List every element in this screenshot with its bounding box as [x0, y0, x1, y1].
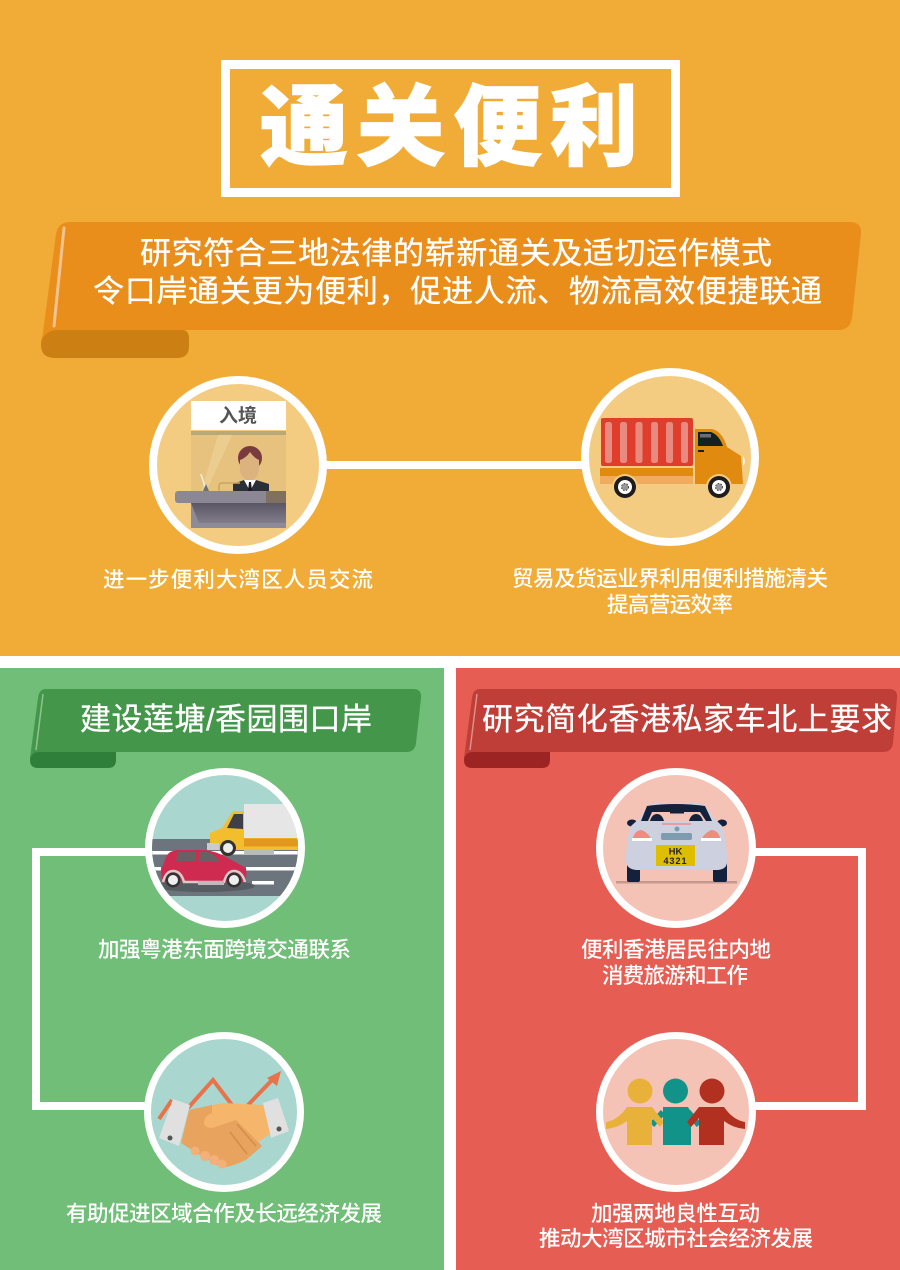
- caption: cargo clearance: 提高营运效率: [607, 593, 733, 617]
- icon: Hong Kong car rear view: 4321: [663, 856, 688, 866]
- connector: left bracket: [36, 852, 150, 1106]
- icon: Hong Kong car rear view: [600, 772, 752, 924]
- panel: private cars northbound: [456, 668, 900, 1270]
- banner: main summary: 研究符合三地法律的崭新通关及适切运作模式: [140, 236, 772, 271]
- icon: handshake and rising arrow: [148, 1036, 300, 1188]
- icon: truck and car on road: [145, 772, 306, 924]
- icon: three people linked: [600, 1036, 752, 1188]
- panel: top customs facilitation: [0, 0, 900, 656]
- caption: residents travel and work: 便利香港居民往内地: [581, 938, 771, 962]
- title: 通关便利: [260, 78, 638, 177]
- banner: private car heading: 研究简化香港私家车北上要求: [482, 702, 892, 737]
- panel: Liantang/Heung Yuen Wai port: [0, 668, 444, 1270]
- icon: delivery truck: [585, 372, 755, 542]
- banner: main summary: [41, 222, 861, 358]
- caption: two-way interaction: 推动大湾区城市社会经济发展: [539, 1227, 813, 1251]
- title: [226, 64, 676, 192]
- caption: cross-border traffic: 加强粤港东面跨境交通联系: [98, 938, 351, 962]
- caption: cargo clearance: 贸易及货运业界利用便利措施清关: [512, 567, 828, 591]
- caption: people flow: 进一步便利大湾区人员交流: [103, 568, 373, 592]
- banner: main summary: 令口岸通关更为便利，促进人流、物流高效便捷联通: [93, 274, 822, 309]
- banner: port heading: 建设莲塘/香园围口岸: [80, 702, 372, 737]
- caption: cargo clearance: [512, 567, 828, 617]
- caption: regional cooperation: 有助促进区域合作及长远经济发展: [66, 1202, 382, 1226]
- connector line: [322, 461, 586, 469]
- icon: Hong Kong car rear view: HK: [669, 846, 682, 858]
- icon: immigration booth: 入境: [219, 404, 257, 427]
- caption: residents travel and work: 消费旅游和工作: [602, 964, 748, 988]
- caption: two-way interaction: [539, 1202, 813, 1251]
- icon: immigration booth: [153, 380, 323, 550]
- connector: right bracket: [750, 852, 862, 1106]
- banner: private car heading: [464, 689, 897, 768]
- caption: two-way interaction: 加强两地良性互动: [591, 1202, 760, 1226]
- caption: residents travel and work: [581, 938, 771, 988]
- banner: port heading: [30, 689, 421, 768]
